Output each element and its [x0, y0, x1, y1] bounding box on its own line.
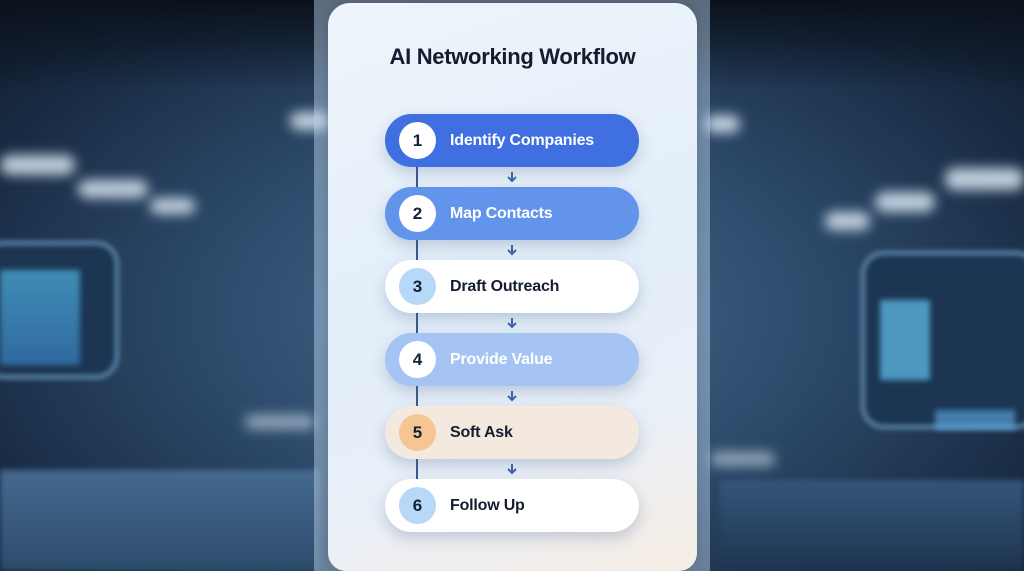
step 2	[385, 187, 639, 240]
arrow 5	[507, 464, 517, 474]
step 6	[385, 479, 639, 532]
step 2: Map Contacts	[450, 205, 552, 222]
step 1	[385, 114, 639, 167]
step 2: 2	[413, 204, 422, 223]
step 5: 5	[413, 423, 422, 442]
step 5	[385, 406, 639, 459]
step 5: Soft Ask	[450, 424, 513, 441]
step 4: 4	[413, 350, 422, 369]
arrow 1	[507, 172, 517, 182]
step 1: Identify Companies	[450, 132, 594, 149]
step 3	[385, 260, 639, 313]
arrow 3	[507, 318, 517, 328]
step 4: Provide Value	[450, 351, 552, 368]
arrow 4	[507, 391, 517, 402]
step 3: Draft Outreach	[450, 278, 559, 295]
arrow 2	[507, 245, 517, 256]
main panel	[328, 3, 697, 571]
title: AI Networking Workflow	[389, 44, 636, 69]
frosted edge strip	[314, 0, 710, 571]
step 1: 1	[413, 131, 422, 150]
step 3: 3	[413, 277, 422, 296]
step 4	[385, 333, 639, 386]
step 6: Follow Up	[450, 497, 525, 514]
connector line	[416, 160, 418, 490]
step 6: 6	[413, 496, 422, 515]
